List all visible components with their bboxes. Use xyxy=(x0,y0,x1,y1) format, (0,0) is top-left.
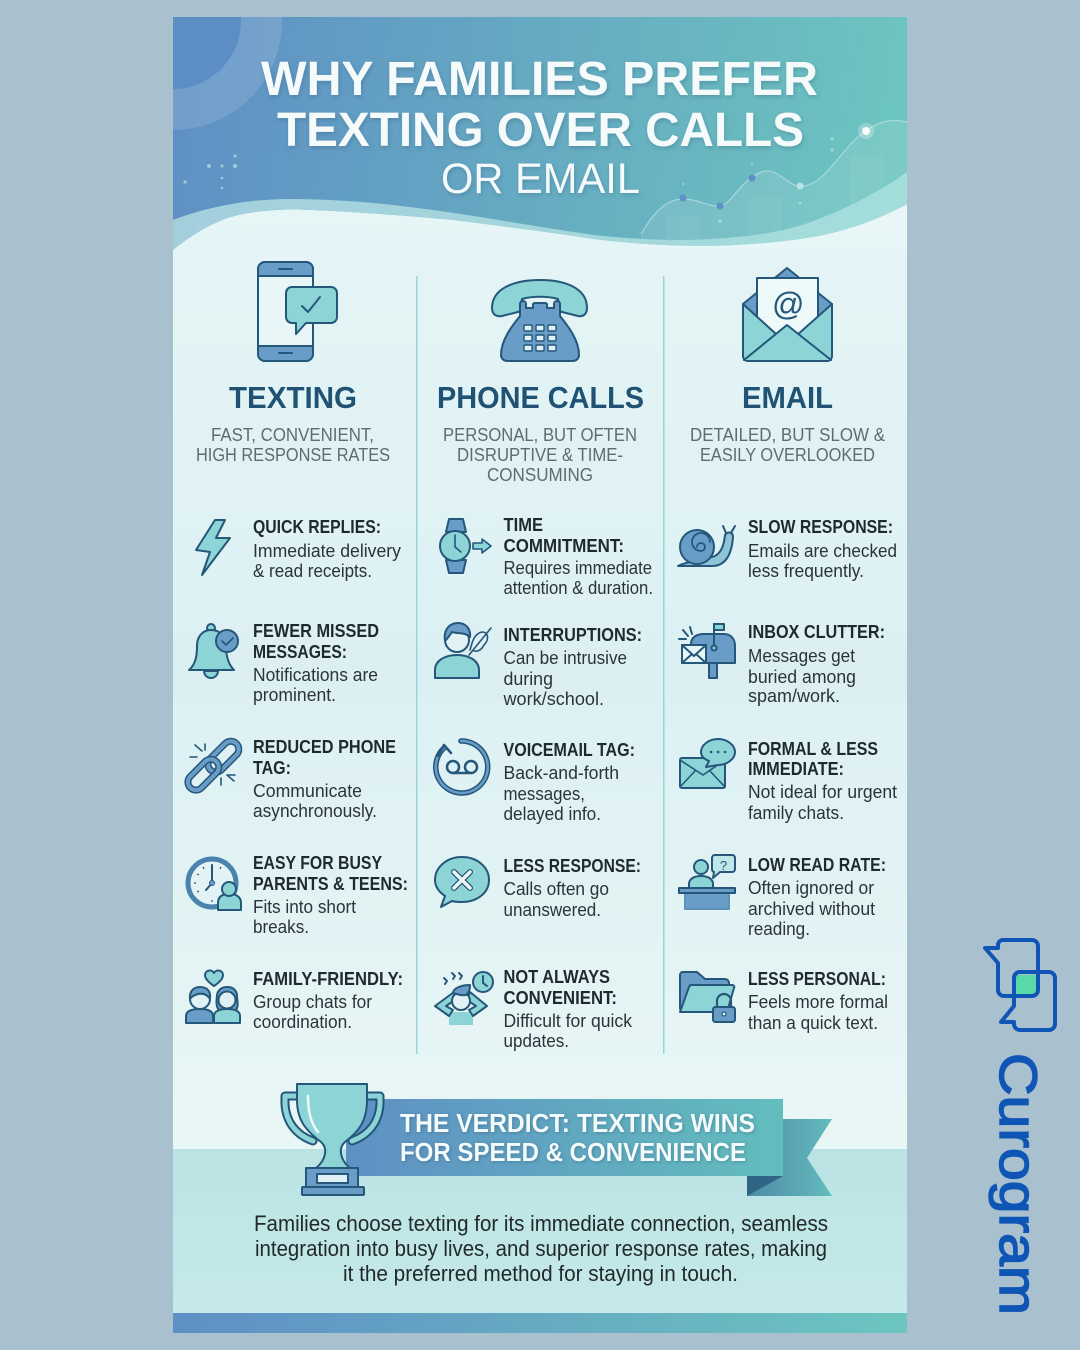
verdict body text: Families choose texting for its immediate connection, seamless xyxy=(254,1211,828,1236)
text: formal and less immediate: Not ideal for urgent xyxy=(748,782,897,802)
text: reduced phone tag: REDUCED PHONE xyxy=(253,737,396,757)
title: OR EMAIL xyxy=(441,155,640,203)
subtitle: texting: FAST, CONVENIENT, xyxy=(211,425,374,445)
subtitle: email: EASILY OVERLOOKED xyxy=(700,445,875,465)
subtitle: phone calls: CONSUMING xyxy=(487,465,593,485)
heading: email: EMAIL xyxy=(742,380,833,415)
text: voicemail tag: Back-and-forth xyxy=(504,763,619,783)
verdict heading: THE VERDICT: TEXTING WINS xyxy=(400,1110,755,1138)
text: voicemail tag: messages, xyxy=(504,784,585,804)
text: easy for busy parents and teens: Fits into short xyxy=(253,897,356,917)
divider left xyxy=(416,276,418,1054)
text: inbox clutter: buried among xyxy=(748,667,856,687)
logo: curogram xyxy=(985,940,1055,1315)
panel: verdict xyxy=(173,1084,907,1313)
text: family-friendly xyxy=(254,972,402,1028)
text: less response: Calls often go xyxy=(504,879,609,899)
item: family-friendly xyxy=(186,969,403,1032)
icon: person at desk with question xyxy=(679,855,735,909)
panel: email column xyxy=(678,268,897,1033)
text: reduced phone tag: Communicate xyxy=(253,781,362,801)
text: easy for busy parents and teens: breaks. xyxy=(253,917,309,937)
icon: smartphone with message xyxy=(258,262,337,361)
subtitle: phone calls xyxy=(444,428,636,481)
item: less response xyxy=(435,856,641,920)
text: less personal: LESS PERSONAL: xyxy=(748,969,886,989)
icon: person with crossed ear xyxy=(435,623,491,678)
panel: texting column xyxy=(185,262,408,1032)
text: interruptions: work/school. xyxy=(502,689,604,709)
text: less personal: than a quick text. xyxy=(748,1013,878,1033)
text: less response: unanswered. xyxy=(504,900,601,920)
text: time commitment: attention & duration. xyxy=(504,578,653,598)
text: voicemail tag: VOICEMAIL TAG: xyxy=(504,740,635,760)
icon: trophy xyxy=(285,1084,380,1195)
ribbon xyxy=(346,1099,783,1176)
text: reduced phone tag: asynchronously. xyxy=(253,801,377,821)
text: slow response: less frequently. xyxy=(748,561,864,581)
icon glyph: at sign: @ xyxy=(772,286,804,322)
verdict body text: it the preferred method for staying in touch. xyxy=(343,1261,738,1286)
item: interruptions xyxy=(435,623,642,709)
text: fewer missed messages: prominent. xyxy=(253,685,336,705)
item: reduced phone tag xyxy=(185,737,396,821)
title xyxy=(261,62,818,196)
text: formal and less immediate: FORMAL & LESS xyxy=(748,739,878,759)
icon: parents and heart xyxy=(186,971,240,1023)
text: interruptions xyxy=(502,625,642,709)
verdict body text: integration into busy lives, and superior response rates, making xyxy=(255,1236,827,1261)
text: fewer missed messages: FEWER MISSED xyxy=(253,621,379,641)
item: quick replies xyxy=(196,517,401,581)
text: formal and less immediate: family chats. xyxy=(748,803,844,823)
heading: phone calls: PHONE CALLS xyxy=(437,380,644,415)
footer bar xyxy=(173,1313,907,1333)
text: time commitment xyxy=(504,515,653,598)
text: fewer missed messages: Notifications are xyxy=(253,665,378,685)
text: less personal: Feels more formal xyxy=(748,992,888,1012)
icon: watch with arrow xyxy=(440,519,491,573)
panel: phone calls column xyxy=(435,280,653,1051)
text: not always convenient: NOT ALWAYS xyxy=(504,967,610,987)
subtitle: phone calls: PERSONAL, BUT OFTEN xyxy=(443,425,637,445)
text: not always convenient: CONVENIENT: xyxy=(504,988,617,1008)
text: quick replies: Immediate delivery xyxy=(253,541,401,561)
icon: lightning bolt xyxy=(196,520,230,575)
text: reduced phone tag xyxy=(253,737,396,821)
item: easy for busy parents and teens xyxy=(188,853,408,937)
verdict heading: FOR SPEED & CONVENIENCE xyxy=(400,1139,746,1167)
text: time commitment: COMMITMENT: xyxy=(504,536,624,556)
text: formal and less immediate xyxy=(748,739,897,823)
text: voicemail tag xyxy=(504,740,635,824)
text: interruptions: INTERRUPTIONS: xyxy=(504,625,642,645)
text: not always convenient: updates. xyxy=(504,1031,569,1051)
subtitle: texting: HIGH RESPONSE RATES xyxy=(196,445,390,465)
text: family-friendly: FAMILY-FRIENDLY: xyxy=(253,969,403,989)
text: low read rate xyxy=(748,855,886,939)
text: quick replies: QUICK REPLIES: xyxy=(253,517,381,537)
icon: bell with check xyxy=(189,624,238,678)
icon: chain link xyxy=(185,738,242,793)
wordmark: Curogram xyxy=(988,1053,1047,1315)
item: fewer missed messages xyxy=(189,621,379,705)
text: voicemail tag: delayed info. xyxy=(504,804,601,824)
text: easy for busy parents and teens: EASY FOR BUSY xyxy=(253,853,382,873)
text: quick replies xyxy=(253,517,401,581)
icon: voicemail loop xyxy=(436,741,488,793)
text: reduced phone tag: TAG: xyxy=(253,758,291,778)
icon: stressed person with clock xyxy=(435,972,493,1025)
verdict heading xyxy=(400,1110,755,1167)
icon: speech bubble with cross xyxy=(435,857,489,907)
panel: header banner xyxy=(173,17,907,250)
item: time commitment xyxy=(440,515,653,598)
text: less response xyxy=(504,856,641,920)
text: low read rate: LOW READ RATE: xyxy=(748,855,886,875)
text: inbox clutter: INBOX CLUTTER: xyxy=(748,622,885,642)
text: less personal xyxy=(748,969,888,1033)
ribbon tail xyxy=(747,1119,832,1196)
text: fewer missed messages: MESSAGES: xyxy=(253,642,347,662)
text: not always convenient: Difficult for quick xyxy=(504,1011,633,1031)
item: slow response xyxy=(678,517,897,581)
item: voicemail tag xyxy=(436,740,635,824)
text: slow response xyxy=(748,517,897,581)
text: family-friendly: coordination. xyxy=(253,1012,352,1032)
text: inbox clutter xyxy=(748,622,885,706)
icon: open envelope with letter xyxy=(743,268,832,361)
verdict background band xyxy=(173,1149,907,1313)
text: inbox clutter: spam/work. xyxy=(748,686,840,706)
item: not always convenient xyxy=(435,967,633,1051)
icon: clock with person xyxy=(188,859,241,910)
subtitle: email: DETAILED, BUT SLOW & xyxy=(690,425,885,445)
item: formal and less immediate xyxy=(680,739,897,823)
heading: texting: TEXTING xyxy=(229,380,357,415)
subtitle: phone calls: DISRUPTIVE & TIME- xyxy=(457,445,623,465)
icon: mailbox with envelope xyxy=(679,624,735,678)
icon glyph: question mark: ? xyxy=(720,858,727,873)
text: easy for busy parents and teens xyxy=(253,853,408,937)
subtitle: texting xyxy=(197,428,390,461)
icon: folder with padlock xyxy=(680,972,735,1022)
item: low read rate xyxy=(679,855,886,939)
divider right xyxy=(663,276,664,1054)
icon: envelope with chat bubble xyxy=(680,739,735,788)
ribbon fold xyxy=(747,1176,783,1196)
text: time commitment: TIME xyxy=(504,515,543,535)
text: fewer missed messages xyxy=(253,621,379,705)
panel: infographic card xyxy=(173,17,907,1333)
item: inbox clutter xyxy=(679,622,885,706)
subtitle: email xyxy=(690,425,885,465)
card body xyxy=(173,204,907,1149)
text: low read rate: Often ignored or xyxy=(748,878,874,898)
text: less response: LESS RESPONSE: xyxy=(504,856,641,876)
verdict body text xyxy=(254,1211,828,1286)
text: not always convenient xyxy=(504,967,633,1051)
text: low read rate: reading. xyxy=(748,919,810,939)
icon: snail xyxy=(678,526,735,566)
text: formal and less immediate: IMMEDIATE: xyxy=(748,759,844,779)
text: inbox clutter: Messages get xyxy=(748,646,855,666)
text: slow response: Emails are checked xyxy=(748,541,897,561)
icon: rotary telephone xyxy=(492,280,587,361)
text: family-friendly: Group chats for xyxy=(253,992,372,1012)
text: interruptions: during xyxy=(504,669,553,689)
title: WHY FAMILIES PREFER xyxy=(261,52,818,106)
title: TEXTING OVER CALLS xyxy=(277,103,804,157)
text: low read rate: archived without xyxy=(748,899,875,919)
icon: overlapping chat bubbles xyxy=(985,940,1055,1030)
text: time commitment: Requires immediate xyxy=(504,558,652,578)
text: easy for busy parents and teens: PARENTS & TEENS: xyxy=(253,874,408,894)
text: quick replies: & read receipts. xyxy=(253,561,372,581)
item: less personal xyxy=(680,969,888,1033)
text: interruptions: Can be intrusive xyxy=(504,648,627,668)
text: slow response: SLOW RESPONSE: xyxy=(748,517,893,537)
